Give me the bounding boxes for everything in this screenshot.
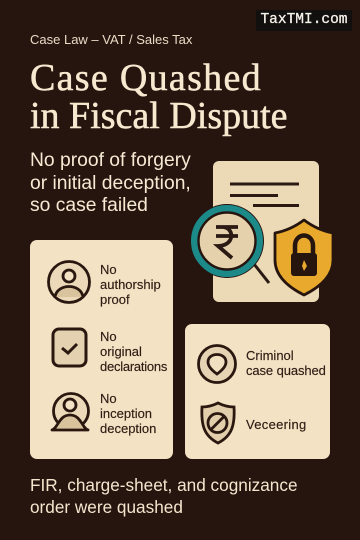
text: criminol case quashed: case quashed — [246, 363, 326, 378]
icon: checkbox — [52, 328, 88, 368]
text: no authorship proof — [100, 262, 161, 307]
text: no original declarations: declarations — [100, 359, 167, 374]
illustration: document with magnifier and shield — [191, 161, 332, 302]
text: no inception deception: inception — [100, 406, 152, 421]
title: in Fiscal Dispute — [30, 95, 288, 137]
panel: findings — [30, 240, 173, 459]
subtitle: so case failed — [30, 195, 148, 216]
subtitle — [30, 150, 191, 216]
icon: person in circle — [47, 260, 91, 304]
text: criminol case quashed — [246, 348, 326, 378]
shield with padlock — [275, 220, 333, 295]
title: Case Quashed — [30, 57, 262, 99]
category label: Case Law – VAT / Sales Tax — [30, 32, 192, 47]
footer text: order were quashed — [30, 497, 183, 517]
text: no inception deception: deception — [100, 421, 156, 436]
text: no original declarations: No — [100, 329, 117, 344]
text: criminol case quashed: Criminol — [246, 348, 294, 363]
title — [30, 57, 288, 137]
icon: shield with prohibition — [200, 401, 236, 445]
watermark — [256, 10, 352, 31]
icon: location badge — [197, 344, 237, 384]
text: no inception deception: No — [100, 391, 117, 406]
text: no authorship proof: authorship — [100, 277, 161, 292]
document — [213, 161, 319, 302]
watermark: TaxTMI.com — [260, 12, 348, 28]
text: no authorship proof: No — [100, 262, 117, 277]
text: veceering: Veceering — [246, 417, 307, 432]
text: no authorship proof: proof — [100, 292, 130, 307]
footer text: FIR, charge-sheet, and cognizance — [30, 475, 298, 495]
icon: person with base — [50, 392, 90, 432]
subtitle: or initial deception, — [30, 172, 191, 194]
subtitle: No proof of forgery — [30, 150, 191, 171]
text: no original declarations: original — [100, 344, 142, 359]
text: no inception deception — [100, 391, 156, 436]
panel: outcomes — [185, 324, 330, 459]
footer text — [30, 475, 298, 517]
magnifier with rupee symbol — [190, 204, 269, 283]
text: no original declarations — [100, 329, 167, 374]
